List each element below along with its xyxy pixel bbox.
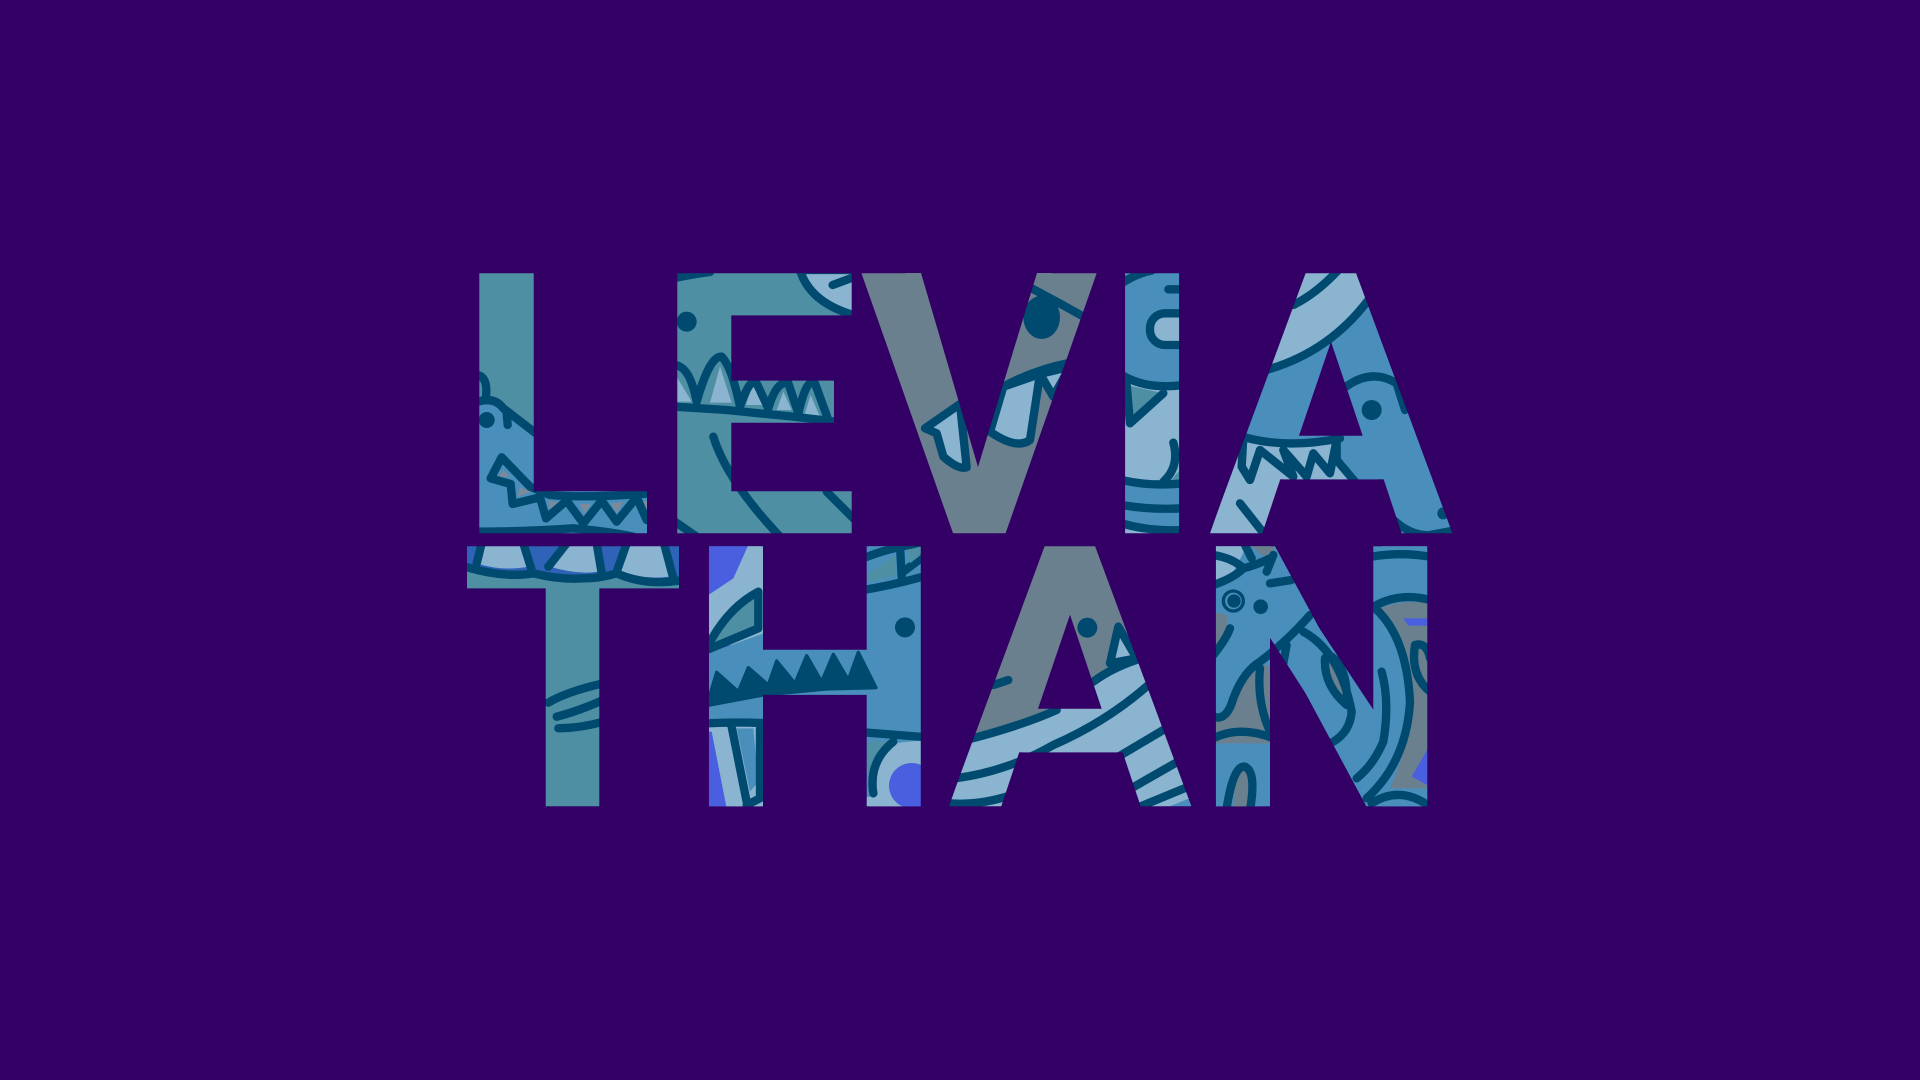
letter L with crocodile head xyxy=(479,273,647,534)
letter I with creature face xyxy=(1125,273,1180,534)
letter V with eye and teeth xyxy=(862,273,1097,534)
title: LEVIATHAN artwork-filled lettering xyxy=(460,260,1460,818)
letter E with toothy grin xyxy=(677,273,852,534)
second A counter xyxy=(1038,615,1102,709)
A counter xyxy=(1299,342,1363,436)
letter H with jagged jaw xyxy=(709,546,921,806)
letter N with serpent xyxy=(1216,546,1428,806)
letter A with band, teeth and eye xyxy=(1210,273,1452,534)
letter T with scalloped teeth xyxy=(467,546,679,806)
E middle arm trim xyxy=(834,370,854,430)
letter A with waves xyxy=(949,546,1192,806)
